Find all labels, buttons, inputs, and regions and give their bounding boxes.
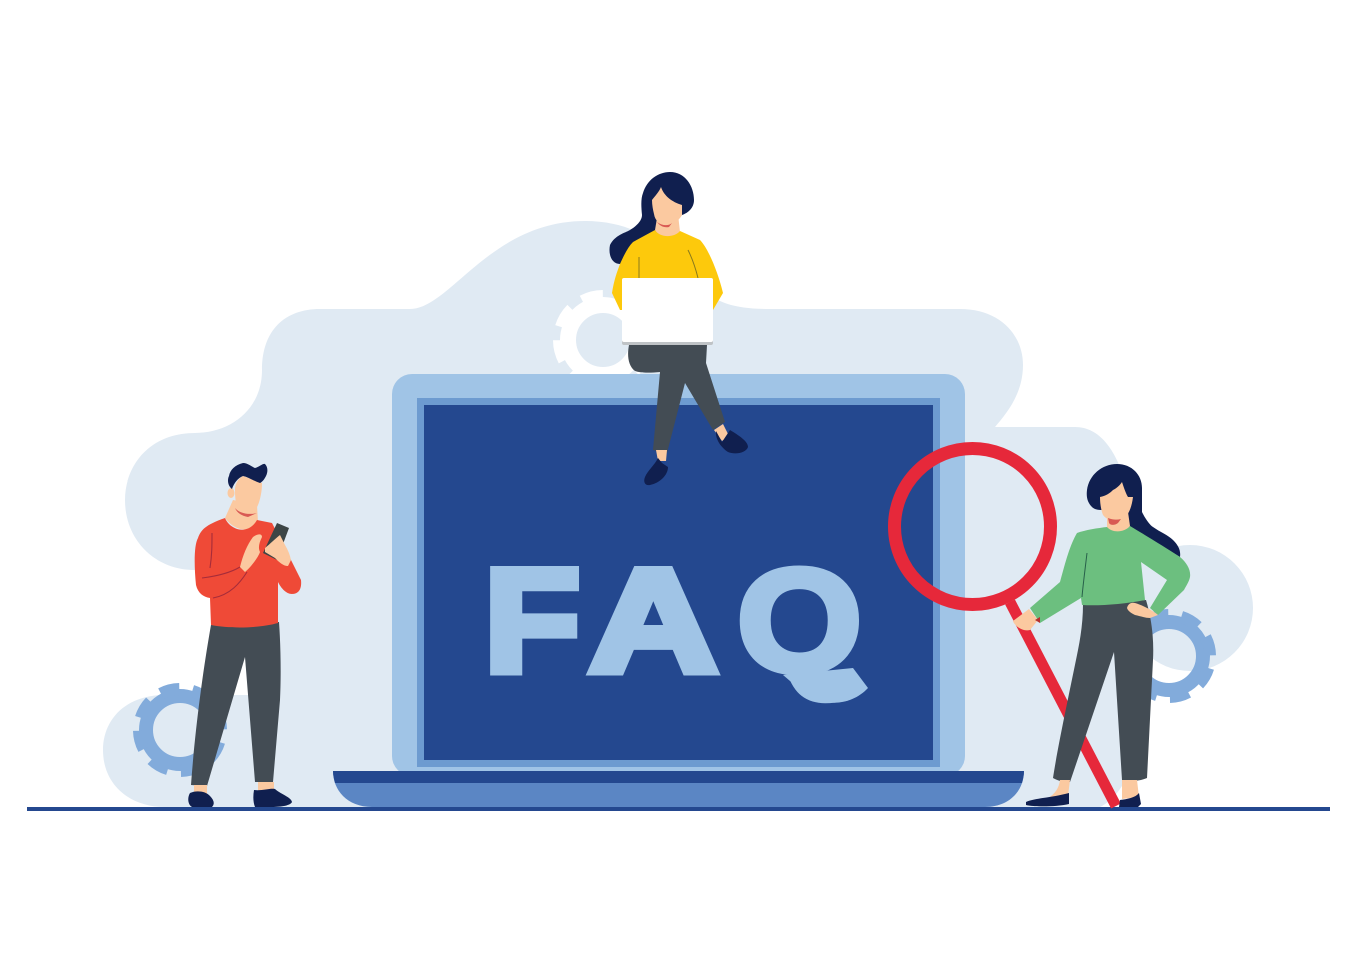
icon: blue gear right — [1118, 605, 1220, 707]
figure: woman sitting on laptop — [609, 172, 748, 485]
man's phone — [263, 523, 289, 560]
background cloud blob — [103, 221, 1253, 807]
man's shirt — [195, 518, 301, 627]
woman's green sweater — [1030, 526, 1190, 623]
icon: blue gear left — [129, 679, 231, 781]
figure: woman with magnifier — [1013, 464, 1190, 807]
woman's flat shoes — [1026, 793, 1141, 807]
man's ankles — [194, 782, 274, 795]
woman's neck shadow — [657, 222, 672, 227]
woman's yellow sweater — [612, 230, 723, 310]
man's sleeve lines — [202, 533, 247, 598]
man's shoes — [188, 789, 292, 807]
man's legs — [191, 622, 281, 786]
heading: FAQ — [484, 539, 868, 703]
man's hands — [240, 534, 291, 572]
laptop screen — [424, 405, 933, 760]
woman's sweater line — [1082, 553, 1087, 597]
woman's neck — [1107, 512, 1130, 533]
man's head — [235, 476, 262, 513]
woman's pants — [1053, 600, 1153, 782]
icon: white gear behind laptop — [548, 285, 658, 395]
woman's hands — [1013, 603, 1158, 630]
magnifying glass — [894, 448, 1116, 806]
laptop lid — [392, 374, 965, 776]
woman's ankles — [1048, 780, 1139, 799]
man's neck — [225, 500, 258, 529]
man's ear — [228, 488, 234, 498]
heading: FAQ: Q — [737, 539, 862, 702]
figure: man with phone — [188, 463, 301, 807]
woman's head — [652, 187, 682, 225]
woman's long hair — [609, 172, 694, 264]
laptop — [333, 374, 1024, 807]
woman's neck shadow — [1108, 518, 1121, 525]
Q tail — [783, 668, 868, 703]
woman's shoes — [644, 430, 748, 485]
man's neck shadow — [235, 508, 257, 517]
woman's long hair — [1087, 464, 1180, 557]
woman's neck — [655, 214, 680, 238]
laptop base — [333, 771, 1024, 807]
man's hair — [228, 463, 267, 489]
woman's head — [1100, 482, 1133, 522]
woman's crossed legs — [628, 345, 725, 453]
woman's cuff detail — [1035, 617, 1040, 623]
heading: FAQ: A — [589, 539, 718, 702]
small laptop — [622, 278, 713, 345]
laptop screen bezel — [417, 398, 940, 767]
woman's ankles — [656, 424, 729, 461]
ground line — [27, 807, 1330, 811]
heading: FAQ: F — [484, 540, 580, 703]
woman's sweater lines — [639, 250, 698, 278]
